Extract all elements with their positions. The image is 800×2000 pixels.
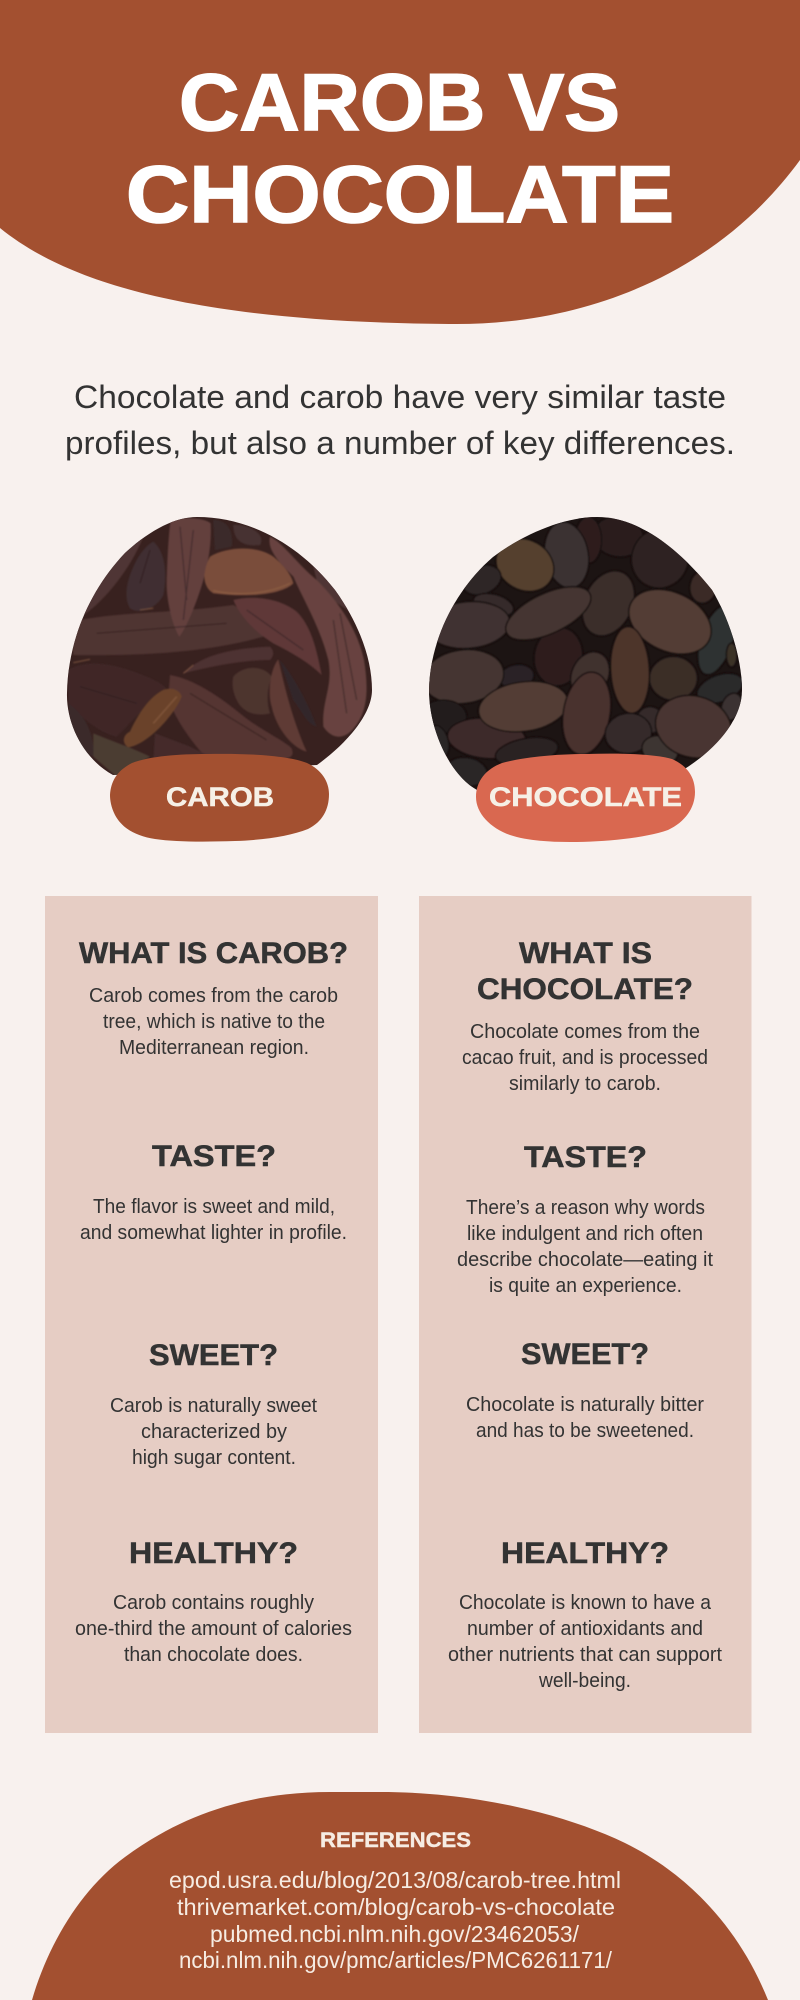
banner shape [0,0,800,324]
carob health: one-third the amount of calories [75,1618,352,1640]
carob sweetness: characterized by [141,1421,287,1443]
carob sweetness [110,1339,317,1469]
carob taste: and somewhat lighter in profile. [80,1222,347,1244]
chocolate health: HEALTHY? [501,1537,669,1570]
what is chocolate: cacao fruit, and is processed [462,1047,708,1069]
chocolate sweetness: and has to be sweetened. [476,1420,694,1442]
chocolate taste: describe chocolate—eating it [457,1249,713,1271]
references list [169,1867,621,1973]
carob photo and label [60,510,380,842]
footer shape [32,1792,768,2000]
panel: chocolate facts [419,896,752,1733]
chocolate health [448,1537,722,1692]
what is chocolate: Chocolate comes from the [470,1021,700,1043]
intro text: profiles, but also a number of key differences. [65,425,735,461]
carob health [75,1537,352,1666]
photo: cacao beans [429,517,742,790]
intro text: Chocolate and carob have very similar taste [74,379,726,415]
carob taste [80,1140,347,1244]
carob sweetness: Carob is naturally sweet [110,1395,317,1417]
references list: epod.usra.edu/blog/2013/08/carob-tree.html [169,1867,621,1893]
header banner [0,0,800,324]
what is carob: tree, which is native to the [103,1011,325,1033]
chocolate taste: like indulgent and rich often [467,1223,703,1245]
carob health: HEALTHY? [129,1537,298,1570]
title: CHOCOLATE [126,150,674,240]
what is carob: Carob comes from the carob [89,985,338,1007]
chocolate taste: There’s a reason why words [466,1197,705,1219]
chocolate health: well-being. [538,1670,631,1692]
references list: pubmed.ncbi.nlm.nih.gov/23462053/ [210,1921,580,1947]
label: chocolate: CHOCOLATE [489,782,682,812]
footer references [32,1792,768,2000]
chocolate photo and label [419,510,750,842]
chocolate taste [457,1141,713,1297]
what is chocolate [462,937,708,1095]
references list: thrivemarket.com/blog/carob-vs-chocolate [177,1894,615,1920]
what is chocolate: WHAT IS [519,937,652,970]
chocolate sweetness: SWEET? [521,1338,649,1371]
label: chocolate [476,754,695,842]
chocolate health: other nutrients that can support [448,1644,722,1666]
chocolate sweetness: Chocolate is naturally bitter [466,1394,704,1416]
chocolate taste: TASTE? [524,1141,647,1174]
panel: carob facts [45,896,378,1733]
what is chocolate: similarly to carob. [509,1073,661,1095]
chocolate health: Chocolate is known to have a [459,1592,712,1614]
what is carob [79,937,348,1059]
what is carob: Mediterranean region. [119,1037,309,1059]
carob taste: The flavor is sweet and mild, [93,1196,335,1218]
title: CAROB VS [179,58,620,148]
intro text [65,379,735,461]
references heading: REFERENCES [320,1829,471,1852]
chocolate taste: is quite an experience. [489,1275,682,1297]
panel background [419,896,752,1733]
carob taste: TASTE? [152,1140,276,1173]
label: carob [110,754,329,842]
chocolate health: number of antioxidants and [467,1618,703,1640]
chocolate sweetness [466,1338,704,1442]
label: carob: CAROB [166,782,274,812]
photo: carob pods [60,510,380,780]
panel background [45,896,378,1733]
title [126,58,674,240]
what is carob: WHAT IS CAROB? [79,937,348,970]
carob health: than chocolate does. [124,1644,303,1666]
carob health: Carob contains roughly [113,1592,314,1614]
references list: ncbi.nlm.nih.gov/pmc/articles/PMC6261171/ [179,1947,613,1973]
carob sweetness: SWEET? [149,1339,278,1372]
carob sweetness: high sugar content. [132,1447,296,1469]
what is chocolate: CHOCOLATE? [477,973,693,1006]
